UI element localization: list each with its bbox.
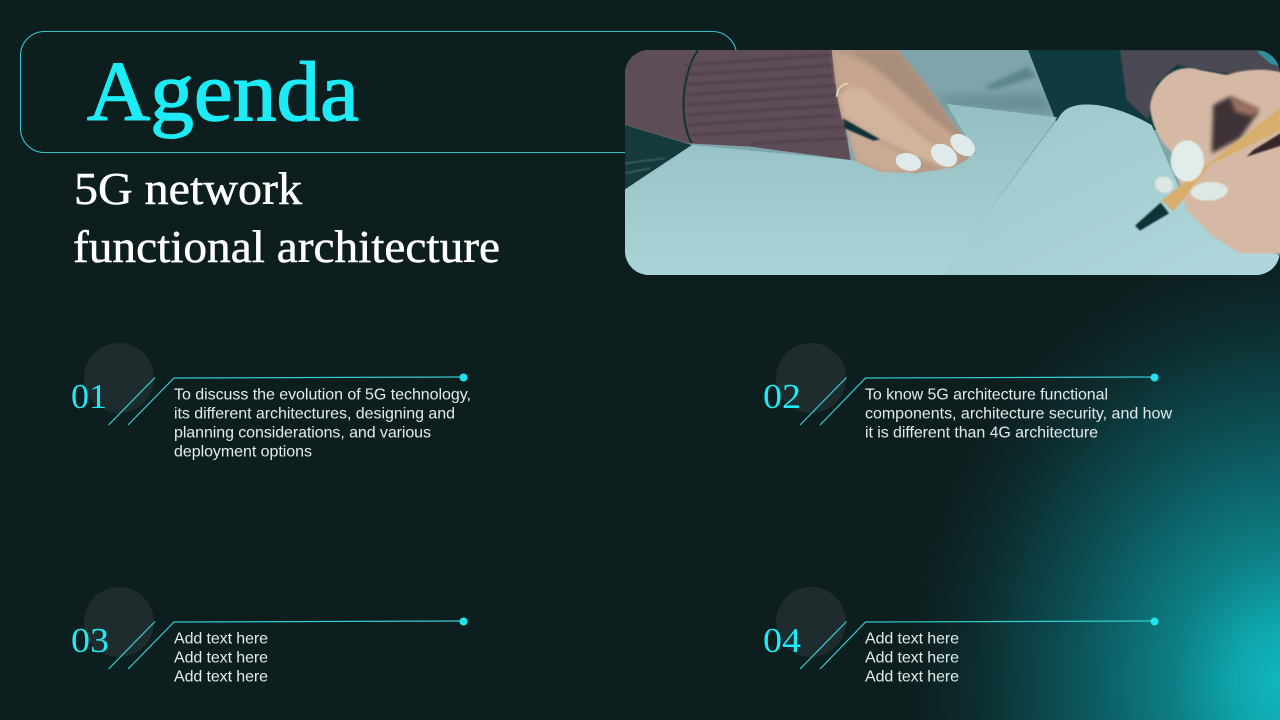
item 03 circle xyxy=(84,587,154,657)
item 03 dot xyxy=(460,618,468,626)
right hand with pencil xyxy=(1135,68,1280,253)
item 04 number: 04 xyxy=(763,621,801,660)
item 01 connector xyxy=(108,377,463,425)
item 02 text: To know 5G architecture functional xyxy=(865,386,1108,404)
item 04 connector xyxy=(800,621,1154,669)
item 01 dot xyxy=(460,374,468,382)
agenda item 04 xyxy=(763,587,1158,686)
item 04 dot xyxy=(1150,618,1158,626)
item 03 number: 03 xyxy=(71,621,109,660)
agenda item 01 xyxy=(71,343,471,460)
title: Agenda xyxy=(87,45,359,139)
item 02 text: it is different than 4G architecture xyxy=(865,424,1098,442)
item 01 text: planning considerations, and various xyxy=(174,424,431,442)
item 01 text: its different architectures, designing and xyxy=(174,406,455,422)
left hand xyxy=(832,50,979,174)
item 01 text xyxy=(174,386,471,460)
item 02 number: 02 xyxy=(763,377,801,416)
item 03 connector xyxy=(108,621,463,669)
right hand nails xyxy=(1171,140,1204,182)
item 04 text xyxy=(865,630,959,686)
subtitle xyxy=(73,163,500,272)
item 02 text: components, architecture security, and how xyxy=(865,406,1172,422)
subtitle: 5G network xyxy=(74,163,302,214)
item 03 text: Add text here xyxy=(174,650,268,666)
item 01 text: deployment options xyxy=(174,444,312,460)
item 03 text: Add text here xyxy=(174,630,268,648)
item 01 text: To discuss the evolution of 5G technology, xyxy=(174,386,471,404)
item 02 connector xyxy=(800,377,1154,425)
agenda item 03 xyxy=(71,587,468,686)
agenda item 02 xyxy=(763,343,1172,442)
item 02 dot xyxy=(1150,374,1158,382)
title frame xyxy=(20,32,736,152)
item 03 text xyxy=(174,630,268,686)
item 04 circle xyxy=(776,587,846,657)
item 04 text: Add text here xyxy=(865,650,959,666)
item 03 text: Add text here xyxy=(174,668,268,686)
item 02 text xyxy=(865,386,1172,442)
teal corner glow xyxy=(900,250,1280,720)
left hand nails xyxy=(896,153,921,171)
photo: hands writing in notebook xyxy=(625,50,1280,275)
right sleeve and cuff xyxy=(1120,50,1280,120)
photo left part: shirt, sleeve and left page xyxy=(625,50,1280,275)
right page of notebook xyxy=(942,104,1280,275)
item 02 circle xyxy=(776,343,846,413)
item 04 text: Add text here xyxy=(865,630,959,648)
item 01 number: 01 xyxy=(71,377,107,416)
item 01 circle xyxy=(84,343,154,413)
item 04 text: Add text here xyxy=(865,668,959,686)
subtitle: functional architecture xyxy=(73,221,500,272)
